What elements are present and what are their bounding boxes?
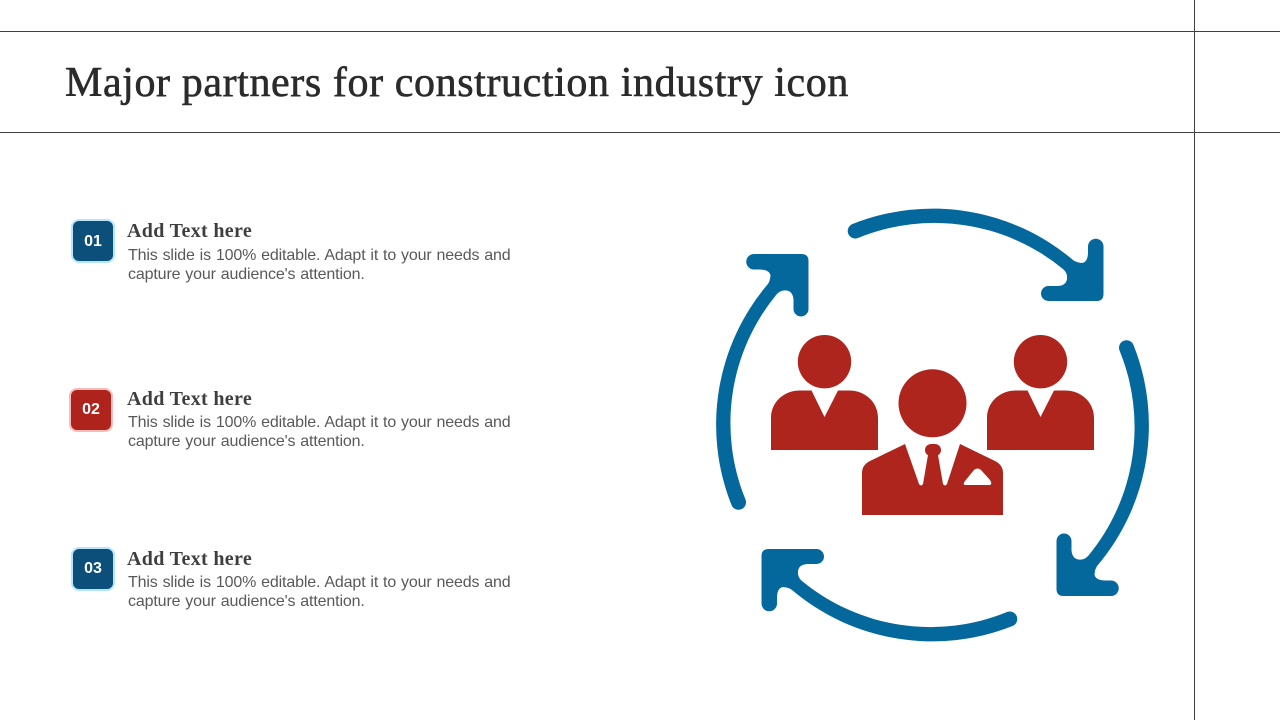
badge 03: 03	[84, 560, 102, 577]
arrow: right	[1056, 340, 1149, 596]
item 03 heading: Add Text here	[127, 548, 252, 570]
item 03 body text	[128, 574, 511, 610]
list item 02	[69, 388, 511, 450]
item 02 body text: capture your audience's attention.	[128, 433, 365, 450]
badge 01	[71, 219, 115, 263]
icon: person center with tie	[862, 369, 1003, 515]
item 01 heading: Add Text here	[127, 220, 252, 242]
item 03 body text: This slide is 100% editable. Adapt it to your needs and	[128, 574, 511, 591]
item 02 heading: Add Text here	[127, 388, 252, 410]
title: Major partners for construction industry icon	[65, 60, 849, 106]
item 02 body text	[128, 414, 511, 450]
item 03 body text: capture your audience's attention.	[128, 593, 365, 610]
item 02 body text: This slide is 100% editable. Adapt it to your needs and	[128, 414, 511, 431]
arrow: left	[716, 254, 808, 510]
icon: person left	[771, 335, 878, 450]
item 01 body text: capture your audience's attention.	[128, 266, 365, 283]
list item 03	[71, 547, 511, 610]
badge 02: 02	[82, 401, 100, 418]
badge 01: 01	[84, 233, 102, 250]
item 01 body text	[128, 247, 511, 283]
badge 03	[71, 547, 115, 591]
list item 01	[71, 219, 511, 283]
arrow: bottom	[762, 549, 1017, 641]
badge 02	[69, 388, 113, 432]
arrow: top	[848, 209, 1104, 301]
icon: person right	[987, 335, 1094, 450]
item 01 body text: This slide is 100% editable. Adapt it to your needs and	[128, 247, 511, 264]
icon: partners cycle	[716, 209, 1149, 641]
